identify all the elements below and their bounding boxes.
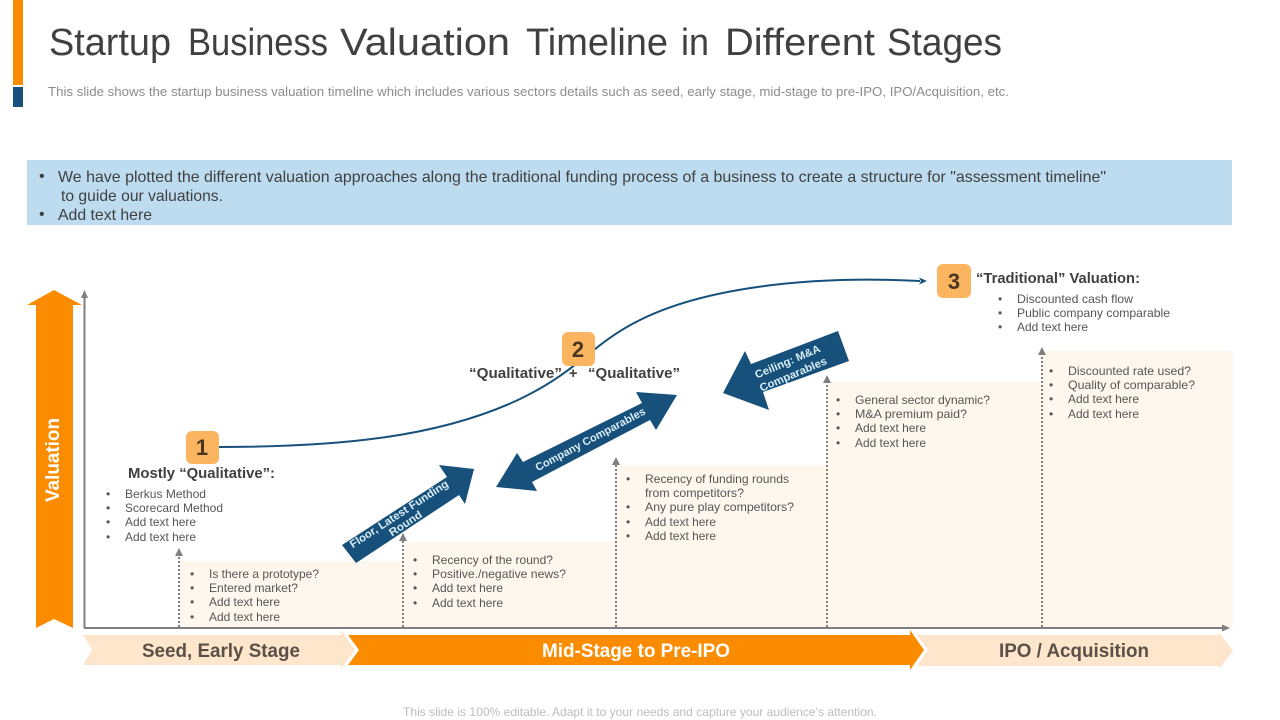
list: sector questions: M&A premium paid? <box>855 407 967 421</box>
chart axes <box>81 290 1230 632</box>
list: qualitative methods: Add text here <box>125 530 196 544</box>
list: competitor questions: Add text here <box>645 515 716 529</box>
heading: qualitative plus qualitative <box>469 366 680 382</box>
list: competitor questions <box>626 472 794 543</box>
arrow: floor, latest funding round: Round <box>387 509 425 539</box>
list: qualitative methods: • <box>106 487 110 501</box>
arrow: valuation axis banner: Valuation <box>43 418 64 502</box>
list: discount questions: Add text here <box>1068 392 1139 406</box>
footer note: This slide is 100% editable. Adapt it to your needs and capture your audience's attention. <box>403 705 877 719</box>
list: traditional methods: Public company comparable <box>1017 306 1170 320</box>
list: traditional methods: • <box>998 306 1002 320</box>
list: round questions: • <box>413 553 417 567</box>
list: sector questions: Add text here <box>855 436 926 450</box>
list: sector questions: • <box>836 407 840 421</box>
list: seed questions: Add text here <box>209 610 280 624</box>
list: traditional methods <box>998 292 1170 334</box>
list: sector questions: • <box>836 436 840 450</box>
list: competitor questions: Recency of funding rounds <box>645 472 789 486</box>
stepped background panels <box>180 351 1233 628</box>
arrow: valuation axis banner <box>27 290 82 628</box>
heading: traditional valuation: “Traditional” Valuation: <box>976 271 1140 287</box>
list: competitor questions: • <box>626 529 630 543</box>
arrow: ceiling, M&A comparables: Ceiling: M&A <box>753 343 822 381</box>
stage: mid-stage to pre-IPO: Mid-Stage to Pre-IPO <box>542 641 730 662</box>
accent bars <box>13 0 23 107</box>
panel: assessment timeline note: • <box>39 168 45 185</box>
arrow: floor, latest funding round: Floor, Latest Funding <box>348 478 451 551</box>
heading: qualitative plus qualitative: + <box>569 366 577 382</box>
list: sector questions: • <box>836 421 840 435</box>
badge 1 <box>186 431 219 464</box>
badge 2 <box>562 332 595 366</box>
badge 1: 1 <box>196 435 208 460</box>
stage: seed, early stage <box>83 630 355 669</box>
list: discount questions: • <box>1049 364 1053 378</box>
list: seed questions <box>190 567 319 624</box>
list: sector questions: Add text here <box>855 421 926 435</box>
arrow: floor, latest funding round <box>342 465 474 563</box>
title: Different <box>725 22 875 64</box>
list: competitor questions: • <box>626 515 630 529</box>
title: in <box>681 22 709 64</box>
panel: assessment timeline note <box>27 160 1232 225</box>
list: traditional methods: Discounted cash flow <box>1017 292 1133 306</box>
list: round questions: Recency of the round? <box>432 553 553 567</box>
arrow: ceiling, M&A comparables <box>723 331 849 410</box>
list: discount questions: • <box>1049 378 1053 392</box>
list: round questions: • <box>413 596 417 610</box>
list: round questions: • <box>413 567 417 581</box>
stage: IPO / acquisition <box>917 632 1233 669</box>
list: seed questions: Add text here <box>209 595 280 609</box>
dotted stage markers <box>175 347 1046 627</box>
list: traditional methods: Add text here <box>1017 320 1088 334</box>
list: qualitative methods: Berkus Method <box>125 487 206 501</box>
heading: qualitative plus qualitative: “Qualitative” <box>469 366 562 382</box>
badge 2: 2 <box>572 337 584 362</box>
title: Timeline <box>526 22 668 64</box>
badge 3: 3 <box>948 269 960 294</box>
list: sector questions: General sector dynamic? <box>855 393 990 407</box>
list: round questions: • <box>413 581 417 595</box>
list: competitor questions: Any pure play competitors? <box>645 500 794 514</box>
list: seed questions: Entered market? <box>209 581 298 595</box>
heading: qualitative plus qualitative: “Qualitative” <box>588 366 680 382</box>
heading: mostly qualitative: Mostly “Qualitative”: <box>128 466 275 482</box>
list: round questions <box>413 553 566 610</box>
panel: assessment timeline note: to guide our valuations. <box>61 188 223 205</box>
list: seed questions: • <box>190 595 194 609</box>
list: qualitative methods: • <box>106 515 110 529</box>
list: competitor questions: Add text here <box>645 529 716 543</box>
list: sector questions <box>836 393 990 450</box>
list: sector questions: • <box>836 393 840 407</box>
list: discount questions: Add text here <box>1068 407 1139 421</box>
list: qualitative methods: Add text here <box>125 515 196 529</box>
list: traditional methods: • <box>998 292 1002 306</box>
title: Valuation <box>340 22 510 64</box>
panel: assessment timeline note: • <box>39 206 45 223</box>
panel: assessment timeline note: Add text here <box>58 207 152 224</box>
list: seed questions: • <box>190 581 194 595</box>
list: traditional methods: • <box>998 320 1002 334</box>
list: discount questions: Discounted rate used? <box>1068 364 1191 378</box>
badge 3 <box>937 264 971 298</box>
stage: mid-stage to pre-IPO <box>348 630 924 670</box>
list: round questions: Positive./negative news? <box>432 567 566 581</box>
list: seed questions: • <box>190 567 194 581</box>
panel: assessment timeline note: We have plotted the different valuation approaches along the traditional funding process of a business to create a structure for "assessment timeline" <box>58 169 1106 186</box>
list: qualitative methods: • <box>106 530 110 544</box>
list: round questions: Add text here <box>432 596 503 610</box>
arrow: ceiling, M&A comparables: Comparables <box>758 355 829 395</box>
list: seed questions: Is there a prototype? <box>209 567 319 581</box>
list: seed questions: • <box>190 610 194 624</box>
subtitle: This slide shows the startup business valuation timeline which includes various sectors details such as seed, early stage, mid-stage to pre-IPO, IPO/Acquisition, etc. <box>48 85 1009 99</box>
title: Startup <box>49 22 171 64</box>
list: qualitative methods <box>106 487 223 544</box>
list: discount questions <box>1049 364 1195 421</box>
title: Business <box>188 22 328 64</box>
list: qualitative methods: Scorecard Method <box>125 501 223 515</box>
list: discount questions: Quality of comparable? <box>1068 378 1195 392</box>
list: discount questions: • <box>1049 392 1053 406</box>
list: discount questions: • <box>1049 407 1053 421</box>
title <box>49 22 1002 64</box>
list: competitor questions: from competitors? <box>645 486 744 500</box>
curve: valuation progression <box>219 278 927 447</box>
list: competitor questions: • <box>626 500 630 514</box>
title: Stages <box>887 22 1002 64</box>
list: qualitative methods: • <box>106 501 110 515</box>
arrow: company comparables: Company Comparables <box>533 406 648 474</box>
list: round questions: Add text here <box>432 581 503 595</box>
list: competitor questions: • <box>626 472 630 486</box>
stage: IPO / acquisition: IPO / Acquisition <box>999 641 1149 662</box>
stage: seed, early stage: Seed, Early Stage <box>142 641 300 662</box>
arrow: company comparables <box>496 392 677 491</box>
